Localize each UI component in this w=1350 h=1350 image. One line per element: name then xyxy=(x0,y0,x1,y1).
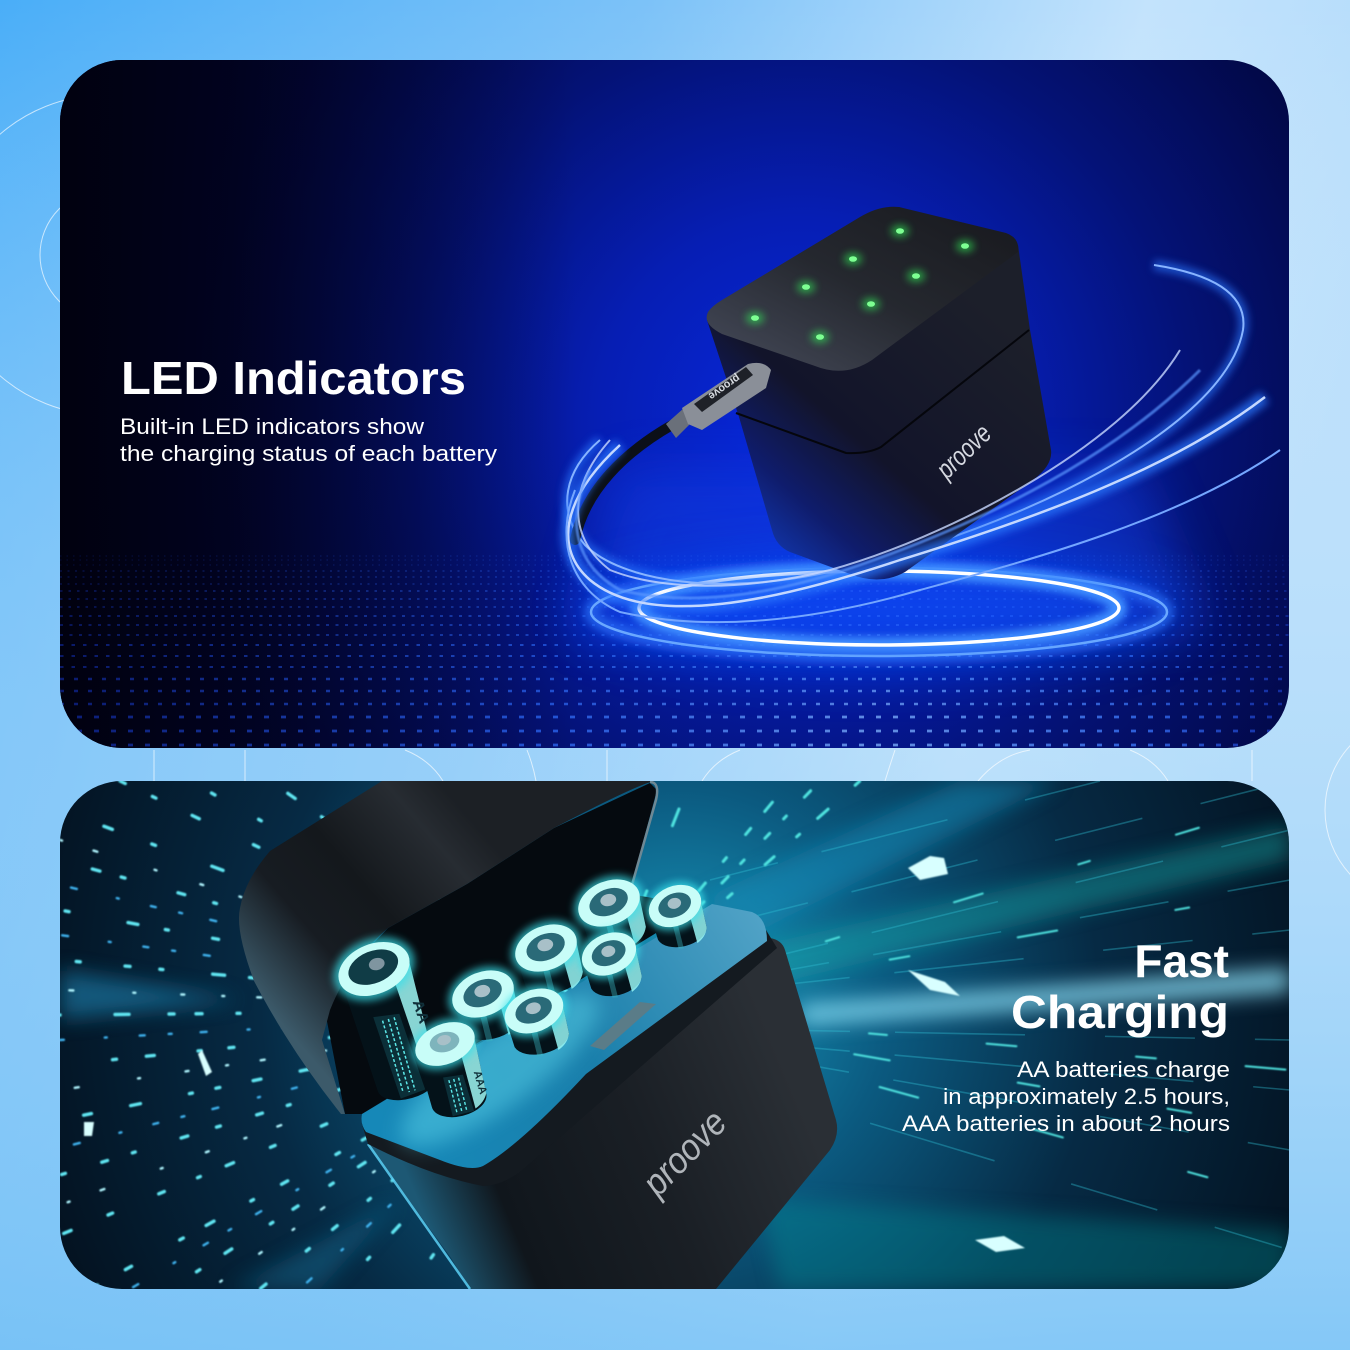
charger lid top xyxy=(707,207,1018,371)
thin radial lines xyxy=(710,781,1290,1250)
device: charger xyxy=(707,207,1051,580)
description: AA batteries charge xyxy=(1017,1057,1230,1082)
speckle left xyxy=(60,781,600,1289)
brand logo: proove xyxy=(634,1102,735,1204)
heading: LED Indicators xyxy=(121,352,466,404)
heading xyxy=(1011,935,1229,1038)
batteries xyxy=(321,864,718,1125)
description: AAA batteries in about 2 hours xyxy=(902,1111,1230,1136)
cable and connector: proove xyxy=(706,372,742,402)
glowing rings xyxy=(591,568,1167,656)
brand logo: proove xyxy=(930,418,997,485)
heading: Charging xyxy=(1011,986,1229,1038)
small AAA battery: AAA xyxy=(471,1069,489,1096)
panel background xyxy=(60,60,1289,748)
large AA battery: AA xyxy=(409,998,432,1026)
large AA battery xyxy=(328,931,428,1100)
body shadow rim xyxy=(362,930,777,1186)
device: open battery charger xyxy=(239,781,837,1289)
panel: fast charging xyxy=(60,781,1290,1289)
cable and connector xyxy=(575,363,771,540)
tray xyxy=(362,904,767,1168)
description: the charging status of each battery xyxy=(120,441,497,466)
charger body xyxy=(364,938,837,1289)
small AAA battery xyxy=(401,1007,500,1125)
light beam and floor glow xyxy=(570,470,1210,667)
lid right edge xyxy=(630,782,657,892)
panel: LED indicators xyxy=(60,60,1290,748)
swirl in front of device xyxy=(566,350,1280,622)
description: in approximately 2.5 hours, xyxy=(943,1084,1230,1109)
radial light streaks xyxy=(60,781,1290,1289)
bright debris xyxy=(84,856,1025,1252)
seam xyxy=(736,330,1029,453)
lid outer xyxy=(239,781,655,1114)
description xyxy=(120,414,497,466)
description xyxy=(902,1057,1230,1136)
dotted floor xyxy=(60,556,1290,745)
lid interior xyxy=(327,783,656,1114)
lit body edge xyxy=(368,1144,470,1289)
label plate xyxy=(590,1002,656,1050)
speckle right xyxy=(642,781,1288,1180)
description: Built-in LED indicators show xyxy=(120,414,424,439)
tray glow xyxy=(393,987,605,1158)
swirl behind device xyxy=(567,265,1243,584)
panel background xyxy=(60,781,1289,1289)
heading: Fast xyxy=(1134,935,1229,987)
LED dots xyxy=(746,225,974,343)
charger body xyxy=(707,207,1051,580)
